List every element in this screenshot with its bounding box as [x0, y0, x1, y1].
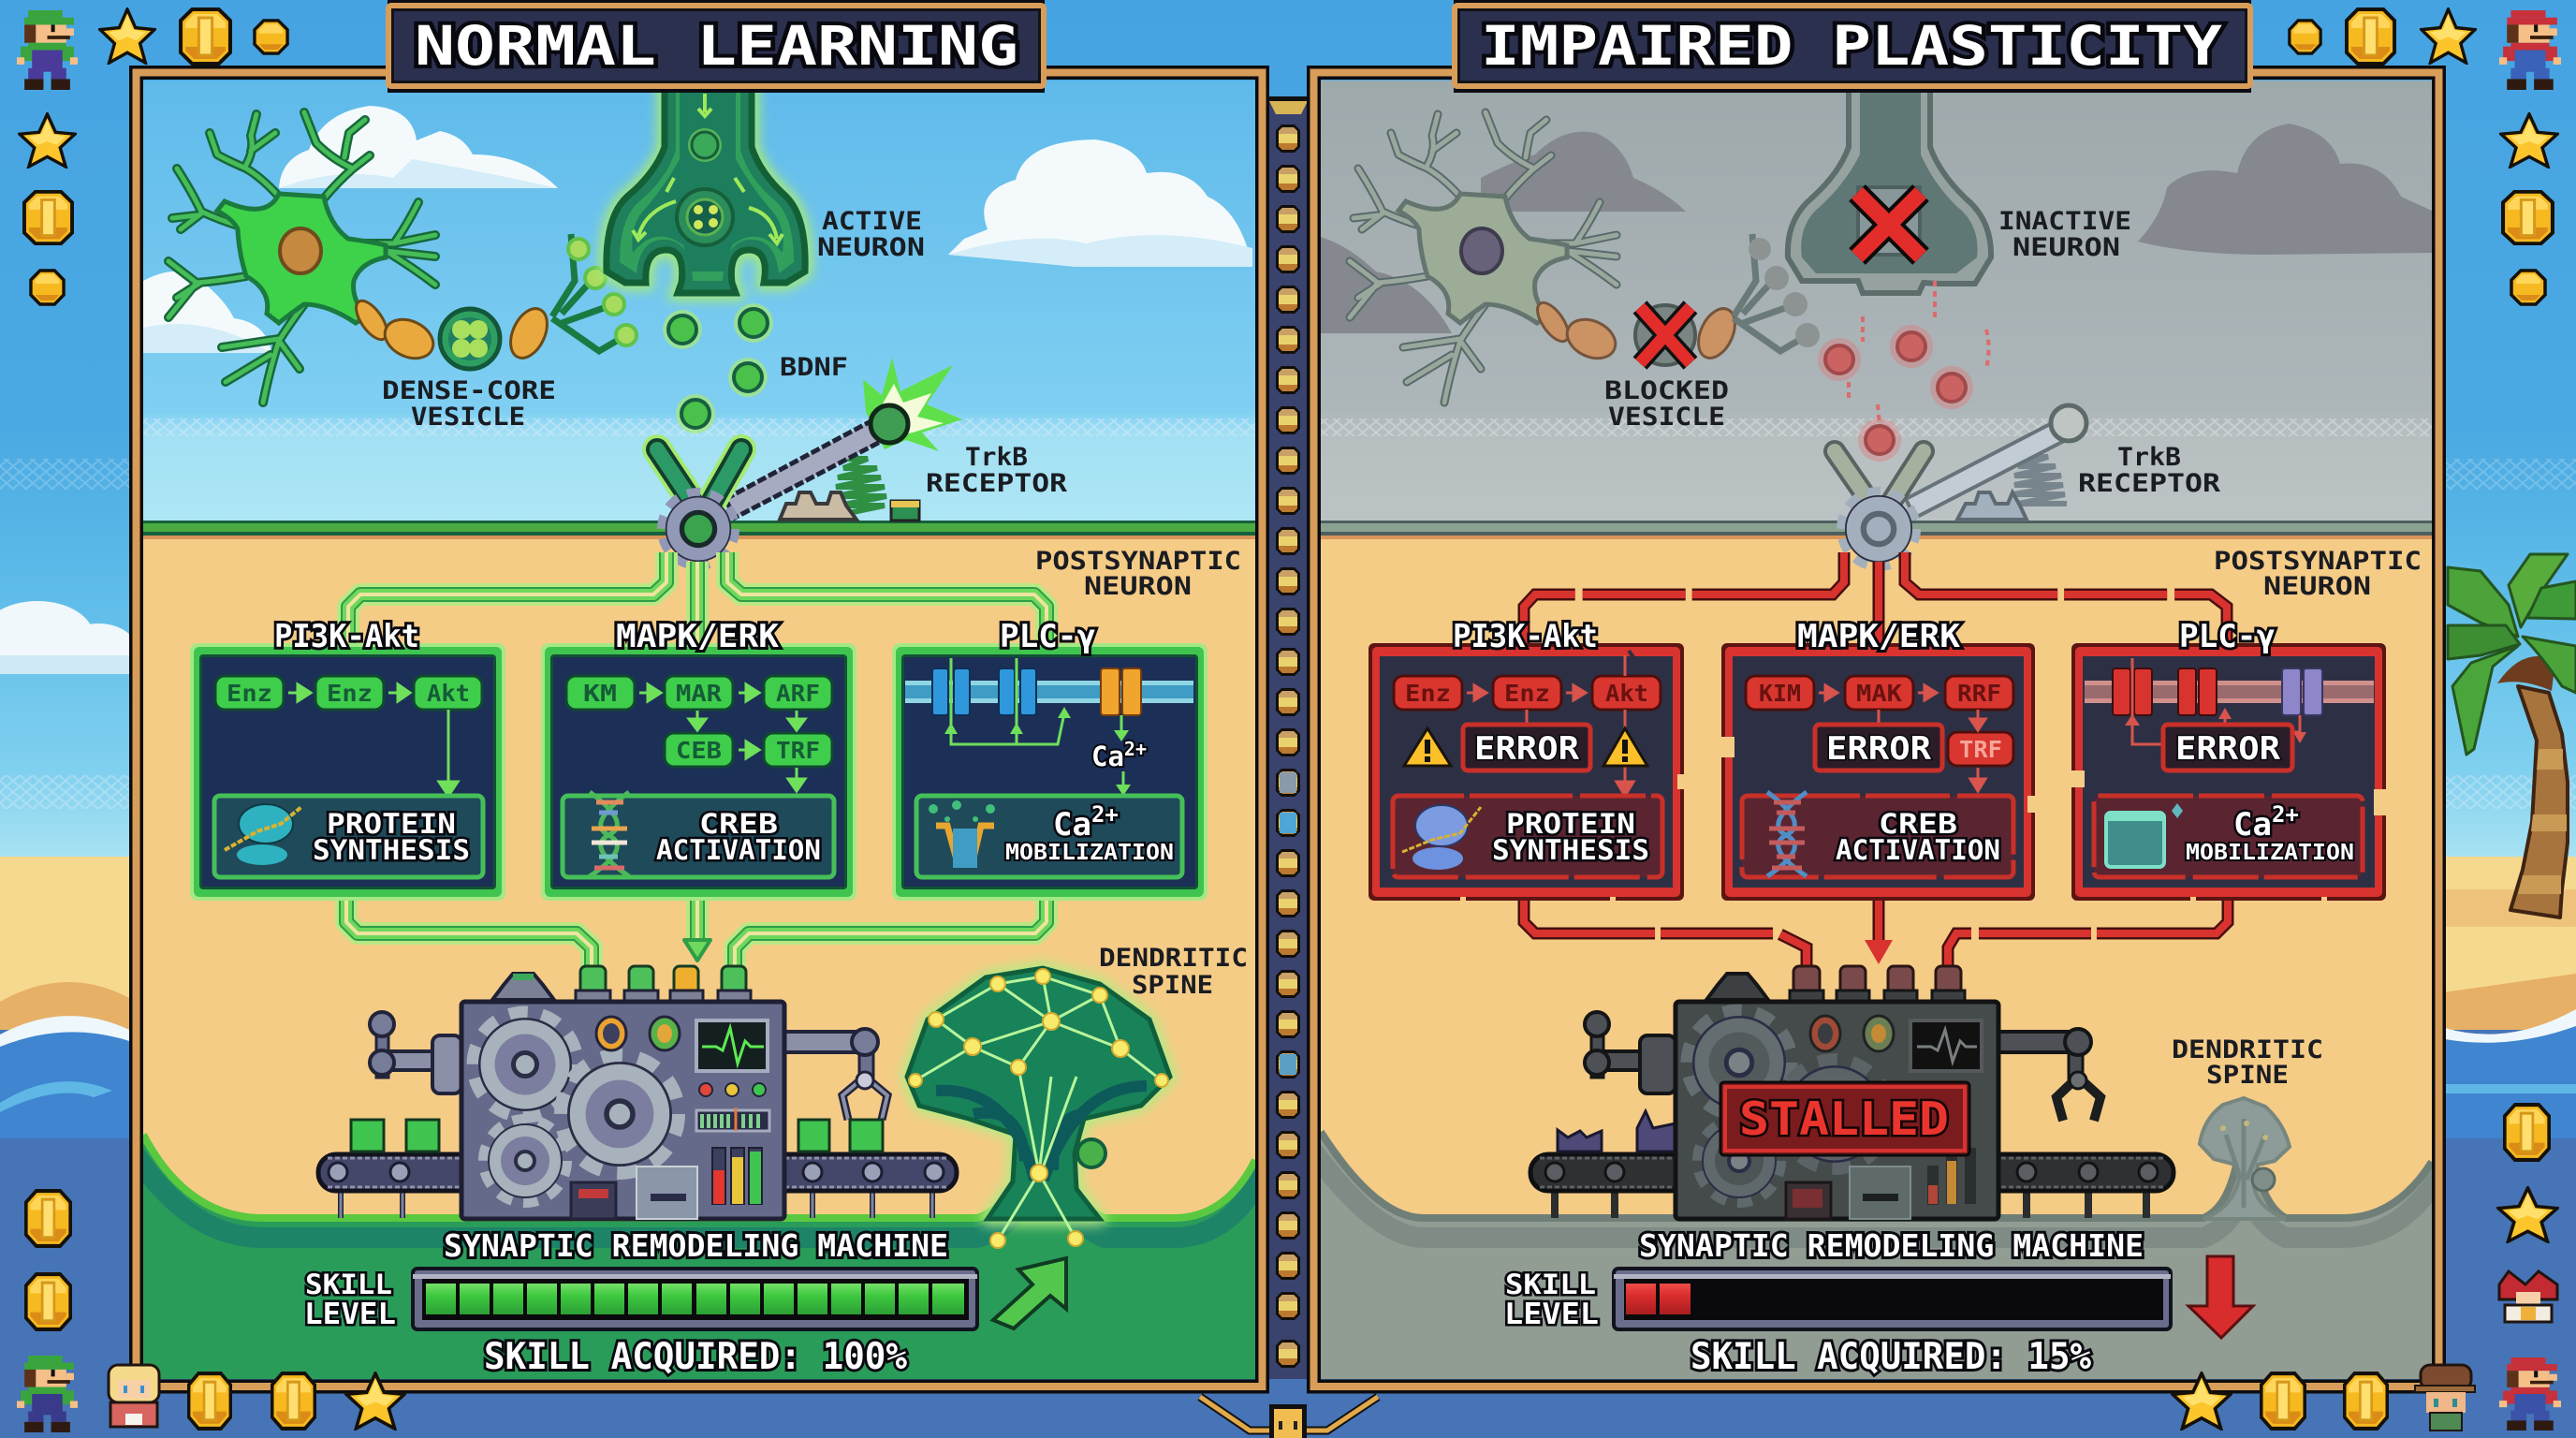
membrane with channels — [905, 658, 1193, 796]
kinase cascade — [566, 676, 832, 791]
labels: right panel: BLOCKED — [1604, 376, 1729, 405]
membrane line — [143, 521, 1255, 536]
result: CREB failing: ACTIVATION — [1836, 834, 2000, 866]
pipes to machine — [346, 899, 1046, 974]
enzyme chain — [215, 676, 482, 796]
terminal branches gray — [1734, 234, 1820, 351]
character: green hero — [17, 10, 78, 90]
character: red hero — [2499, 10, 2561, 90]
axon terminal branches — [552, 234, 637, 351]
labels: left panel: RECEPTOR — [926, 469, 1068, 498]
small gears gray — [1957, 492, 2027, 520]
skill acquired readout: SKILL ACQUIRED: 100% — [484, 1336, 907, 1378]
dense-core vesicle — [440, 309, 500, 369]
decorations: right top — [2290, 9, 2561, 304]
labels: right panel: RECEPTOR — [2078, 469, 2221, 498]
conveyor belts dark — [1530, 1111, 2174, 1218]
broken pipes from receptor — [1524, 552, 2227, 648]
membrane line gray — [1321, 521, 2432, 536]
decorations: left bottom — [17, 1191, 404, 1432]
gauges dark — [1810, 1016, 1894, 1051]
water mesh band — [143, 418, 1255, 436]
character: red hero bottom — [2499, 1357, 2561, 1431]
background: palm tree — [2448, 554, 2576, 917]
stalled sign — [1720, 1082, 1969, 1155]
error badge: ERROR — [1826, 730, 1932, 768]
error badge — [2163, 725, 2292, 770]
broken cargo — [1558, 1111, 1676, 1152]
starburst — [863, 358, 962, 451]
machine body — [461, 1002, 784, 1219]
hatch dark — [1786, 1167, 1910, 1219]
error badge: ERROR — [2175, 730, 2281, 768]
labels: right panel: INACTIVE — [1998, 207, 2131, 236]
pathway box failing: MAPK/ERK: MAPK/ERK — [1797, 618, 1961, 655]
title banner: normal learning — [386, 0, 1046, 93]
kinases red: KIM — [1759, 680, 1801, 707]
mesh band gray — [1321, 418, 2432, 436]
pathway box: PI3K-Akt — [190, 618, 505, 901]
pathway box failing: PLC-gamma: PLC-γ — [2179, 618, 2276, 655]
spring gray — [2014, 457, 2067, 504]
cytoplasm — [143, 539, 1255, 1214]
result: CREB activation: ACTIVATION — [656, 834, 821, 866]
labels: right panel: DENDRITIC — [2172, 1035, 2323, 1064]
lever — [725, 405, 908, 518]
neuron with axon — [168, 112, 637, 403]
result: calcium failing: 2+ — [2272, 801, 2299, 828]
skill level label — [304, 1269, 396, 1331]
labels: left panel: NEURON — [1084, 572, 1192, 601]
TrkB receptor with lever — [657, 358, 962, 564]
box border damage — [1460, 737, 2387, 902]
cytoplasm right — [1321, 536, 2432, 1379]
spring — [836, 459, 886, 515]
status lights — [699, 1083, 766, 1096]
inactive neuron — [1350, 112, 1820, 403]
arrow: skill falling — [2188, 1256, 2253, 1338]
input pipes dark and cone — [1706, 966, 1965, 1002]
result: CREB failing — [1742, 792, 2013, 877]
icon: ribosome blue — [1402, 805, 1481, 870]
error badge — [1463, 725, 1590, 770]
title banner: impaired plasticity: IMPAIRED PLASTICITY — [1481, 14, 2222, 78]
kinases red: MAK — [1856, 680, 1902, 707]
dendritic spine — [907, 968, 1170, 1248]
labels: left panel: NEURON — [817, 233, 925, 262]
labels: right panel — [1604, 207, 2422, 1090]
error badge — [1815, 725, 1942, 770]
kinases red — [1746, 676, 2013, 791]
enzymes red: Enz — [1504, 680, 1550, 707]
blocked vesicle X — [1635, 305, 1695, 365]
labels: right panel: POSTSYNAPTIC — [2214, 547, 2422, 576]
skill level label: SKILL — [305, 1269, 392, 1300]
warning icons — [1404, 728, 1647, 766]
pathway box: MAPK/ERK — [541, 618, 856, 901]
kinase cascade: CEB — [676, 737, 722, 764]
skill level label: SKILL — [1505, 1269, 1596, 1300]
enzymes red: Akt — [1605, 680, 1648, 707]
background: left cloud — [0, 601, 136, 674]
coins and stars — [20, 9, 287, 304]
stalled machine — [1530, 966, 2174, 1219]
right arm with claw — [783, 1029, 887, 1120]
character: princess — [109, 1365, 159, 1427]
result: protein synthesis failing — [1393, 796, 1662, 877]
axon segments — [355, 300, 549, 360]
enzyme chain: Enz — [227, 680, 272, 707]
skill progress bar: 2 segments — [1614, 1269, 2171, 1329]
machine caption: SYNAPTIC REMODELING MACHINE — [1639, 1227, 2144, 1264]
ground gray — [1310, 1132, 2443, 1379]
slider meter — [696, 1108, 769, 1131]
pathway box: PLC-gamma: PLC-γ — [1000, 618, 1096, 655]
background: sky — [0, 0, 2576, 857]
signal pipes from receptor — [348, 552, 1046, 648]
Y arms gray — [1835, 451, 1924, 506]
red X — [1857, 193, 1921, 257]
icon: DNA helix — [590, 792, 629, 876]
character: mushroom — [2499, 1271, 2557, 1322]
membrane with failing channels — [2085, 658, 2374, 744]
pathway box: PLC-gamma — [892, 618, 1208, 901]
labels: right panel: VESICLE — [1608, 403, 1725, 432]
presynaptic terminal — [607, 81, 805, 293]
BDNF particles — [663, 303, 773, 433]
input pipes and cone — [492, 966, 751, 1002]
left arm — [370, 1012, 461, 1093]
background: wave pattern bands — [0, 459, 2576, 809]
cloud upper left — [279, 106, 558, 188]
membrane with channels: 2+ — [1124, 738, 1147, 760]
decorations: left top row and column — [17, 9, 287, 304]
right panel frame — [1314, 73, 2439, 1387]
enzymes red — [1394, 655, 1661, 796]
right arm with claw dark — [1998, 1029, 2100, 1121]
membrane with channels: Ca — [1091, 741, 1124, 772]
pathway box failing: PLC-gamma — [2071, 618, 2386, 901]
weak BDNF particles — [1818, 325, 1973, 462]
labels: left panel: BDNF — [780, 353, 848, 382]
labels: left panel: ACTIVE — [822, 207, 922, 236]
icon: DNA helix failing — [1767, 792, 1807, 876]
labels: right panel: SPINE — [2206, 1061, 2289, 1090]
pathway box: PI3K-Akt: PI3K-Akt — [274, 618, 419, 655]
labels: left panel: DENDRITIC — [1099, 944, 1248, 973]
broken pipes to machine — [1524, 899, 2228, 974]
result: protein synthesis failing: SYNTHESIS — [1492, 834, 1649, 866]
gears dark — [1690, 1013, 1886, 1200]
cloud left — [143, 271, 271, 353]
labels: right panel: NEURON — [2263, 572, 2371, 601]
title banner: normal learning: NORMAL LEARNING — [415, 14, 1018, 78]
panel sky gray — [1321, 81, 2432, 521]
inactive TrkB receptor — [1835, 405, 2086, 565]
result: protein synthesis failing: PROTEIN — [1506, 808, 1635, 840]
kinase cascade: ARF — [776, 680, 820, 707]
skill level label — [1504, 1269, 1599, 1331]
conveyor belts — [318, 1120, 957, 1218]
icon: empty store — [2106, 803, 2183, 867]
skill level label: LEVEL — [1504, 1298, 1599, 1331]
labels: right panel: NEURON — [2012, 233, 2120, 262]
lever gray — [1906, 405, 2086, 518]
divider strip with beads — [1269, 96, 1308, 1379]
result: protein synthesis: PROTEIN — [327, 808, 456, 840]
character: green hero bottom — [17, 1356, 78, 1432]
labels: left panel: DENSE-CORE — [382, 376, 556, 405]
background: sea — [0, 1009, 2576, 1438]
kinase cascade: MAR — [676, 680, 723, 707]
result: calcium mobilization: 2+ — [1091, 801, 1119, 828]
pulse monitor — [696, 1020, 768, 1071]
enzyme chain: Akt — [427, 680, 470, 707]
broken left arm — [1585, 1012, 1676, 1093]
Y antibody arms — [657, 449, 741, 506]
storm cloud middle — [1481, 132, 1686, 212]
cloud right — [948, 139, 1252, 267]
pathway box: MAPK/ERK: MAPK/ERK — [616, 618, 780, 655]
result: protein synthesis: SYNTHESIS — [313, 834, 470, 866]
ground — [131, 1135, 1264, 1379]
coins and stars — [2290, 9, 2557, 304]
labels: left panel: VESICLE — [411, 403, 525, 432]
bottom ornament — [1200, 1397, 1378, 1438]
machine caption: SYNAPTIC REMODELING MACHINE — [444, 1227, 948, 1264]
level bars dim — [1927, 1148, 1976, 1205]
result: CREB activation: CREB — [699, 808, 778, 840]
result: calcium failing — [2094, 796, 2363, 877]
red dashes — [1849, 281, 1988, 426]
result: CREB failing: CREB — [1879, 808, 1957, 840]
result: calcium failing: Ca — [2233, 806, 2272, 844]
result: calcium mobilization — [916, 796, 1182, 877]
error badge: ERROR — [1474, 730, 1580, 768]
level bars — [712, 1148, 762, 1204]
skill acquired readout: SKILL ACQUIRED: 15% — [1690, 1336, 2091, 1378]
left panel frame — [137, 73, 1262, 1387]
kinases red: TRF — [1959, 736, 2002, 763]
character: brown explorer — [2415, 1365, 2475, 1431]
skill level label: LEVEL — [304, 1298, 396, 1331]
storm cloud left — [1321, 237, 1452, 333]
decorations: right bottom — [2173, 1105, 2561, 1431]
stalled sign: STALLED — [1739, 1093, 1949, 1146]
gear hub — [664, 494, 733, 564]
result: calcium failing: MOBILIZATION — [2186, 841, 2354, 865]
synaptic remodeling machine — [318, 966, 957, 1219]
kinases red: RRF — [1957, 680, 2001, 707]
result: CREB activation — [563, 792, 834, 877]
kinase cascade: KM — [583, 680, 617, 707]
icon: calcium channel — [929, 800, 995, 868]
storm cloud right — [2138, 124, 2432, 255]
labels: left panel: POSTSYNAPTIC — [1035, 547, 1241, 576]
labels: left panel: SPINE — [1132, 971, 1213, 1000]
coins column — [26, 1191, 70, 1329]
shrunken dendritic spine — [2200, 1098, 2290, 1219]
machine body dark — [1676, 1002, 1998, 1219]
cargo blocks — [351, 1120, 883, 1152]
bottom coins and star — [189, 1373, 404, 1429]
dead monitor — [1910, 1020, 1982, 1071]
small gears — [780, 492, 919, 521]
labels: left panel — [382, 207, 1248, 1000]
labels: right panel: TrkB — [2117, 443, 2181, 472]
enzyme chain: Enz — [327, 680, 373, 707]
result: calcium mobilization: Ca — [1053, 806, 1091, 844]
enzymes red: Enz — [1405, 680, 1451, 707]
panel: impaired plasticity — [1310, 0, 2443, 1387]
hatch and red panel — [571, 1167, 697, 1219]
kinase cascade: TRF — [776, 737, 820, 764]
inactive presynaptic terminal — [1788, 81, 1991, 293]
icon: ribosome — [225, 804, 301, 865]
bottom coins and star — [2173, 1373, 2387, 1429]
pathway box failing: PI3K-Akt: PI3K-Akt — [1453, 618, 1598, 655]
title banner: impaired plasticity — [1452, 0, 2253, 93]
result: protein synthesis — [214, 796, 483, 877]
nucleus — [280, 228, 321, 273]
skill progress bar: 16 of 16 segments — [413, 1269, 977, 1329]
pathway box failing: MAPK/ERK — [1721, 618, 2035, 901]
axon segments dull — [1531, 298, 1742, 366]
background: beach — [0, 857, 2576, 1044]
coins and star column — [2498, 1105, 2557, 1241]
pathway box failing: PI3K-Akt — [1368, 618, 1684, 901]
nucleus gray — [1461, 228, 1502, 273]
panel: normal learning — [131, 0, 1264, 1387]
gears — [476, 1015, 675, 1200]
gauges — [596, 1017, 680, 1050]
labels: left panel: TrkB — [965, 443, 1028, 472]
gear gray — [1843, 493, 1914, 565]
arrow: skill rising — [993, 1258, 1066, 1328]
result: calcium mobilization: MOBILIZATION — [1005, 841, 1174, 865]
panel sky — [143, 81, 1255, 521]
